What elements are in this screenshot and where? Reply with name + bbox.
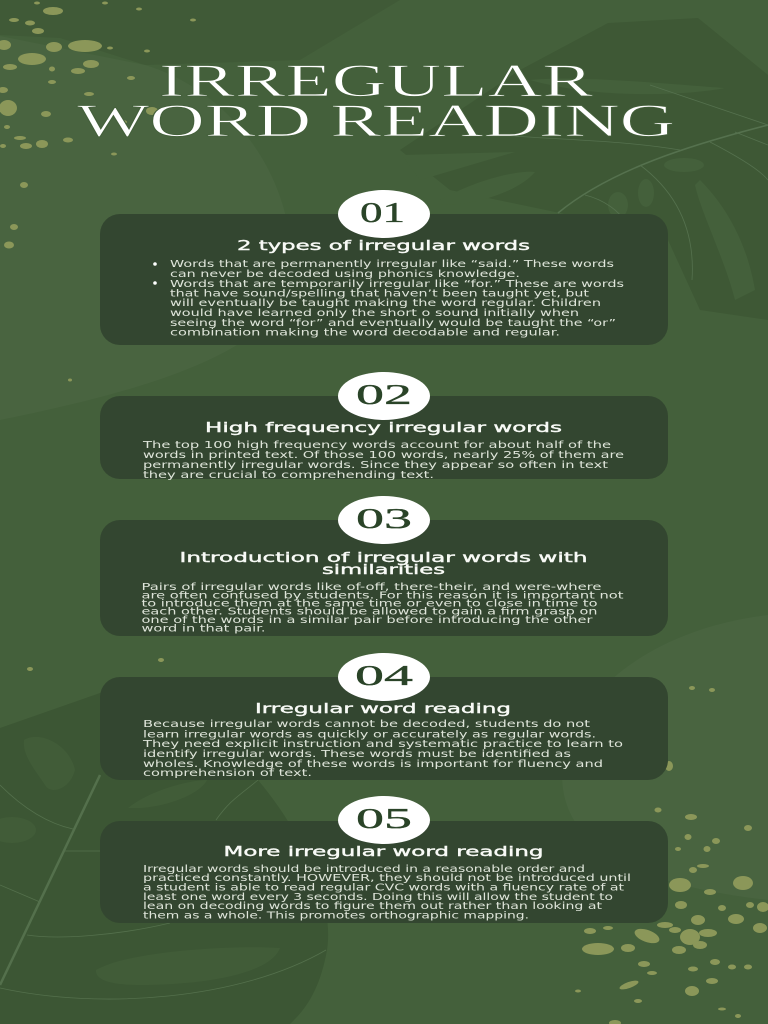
number badge 05: 05: [356, 804, 412, 835]
body text: permanently irregular words. Since they appear so often in text: [143, 460, 608, 471]
body text: wholes. Knowledge of these words is important for fluency and: [143, 759, 603, 770]
number badge 04: 04: [355, 661, 413, 692]
body text: words in printed text. Of those 100 words, nearly 25% of them are: [143, 450, 624, 461]
bullet list: Words that are permanently irregular like “said.” These words: [170, 259, 614, 270]
body text: to introduce them at the same time or even to close in time to: [142, 598, 598, 610]
body text: [141, 440, 624, 481]
panel: high frequency irregular words: [100, 372, 668, 481]
title: IRREGULAR: [159, 55, 594, 107]
panel: introduction of irregular words with similarities: [100, 496, 668, 636]
body text: a student is able to read regular CVC words with a fluency rate of at: [143, 882, 624, 894]
heading: More irregular word reading: [224, 844, 544, 860]
number badge 04: [338, 653, 430, 701]
heading: High frequency irregular words: [205, 420, 562, 436]
body text: Irregular words should be introduced in a reasonable order and: [143, 864, 585, 875]
number badge 01: 01: [360, 198, 405, 229]
bullet list: seeing the word “for” and eventually would be taught the “or”: [170, 318, 616, 329]
title: WORD READING: [77, 95, 675, 147]
panel: irregular word reading: [100, 653, 668, 780]
body text: one of the words in a similar pair before introducing the other: [142, 615, 593, 626]
body text: practiced constantly. HOWEVER, they should not be introduced until: [143, 873, 631, 884]
bullet list: would have learned only the short o sound initially when: [170, 308, 579, 319]
body text: The top 100 high frequency words account for about half of the: [141, 440, 611, 451]
body text: Because irregular words cannot be decoded, students do not: [143, 719, 590, 730]
body text: word in that pair.: [142, 624, 266, 634]
bullet list: [153, 259, 624, 338]
body text: least one word every 3 seconds. Doing this will allow the student to: [143, 892, 613, 903]
panel: more irregular word reading: [100, 796, 668, 923]
body text: Pairs of irregular words like of-off, there-their, and were-where: [142, 582, 602, 593]
number badge 01: [338, 190, 430, 238]
body text: them as a whole. This promotes orthographic mapping.: [143, 910, 529, 922]
heading: similarities: [322, 562, 445, 578]
body text: identify irregular words. These words must be identified as: [143, 749, 571, 760]
bullet list: Words that are temporarily irregular like “for.” These are words: [170, 279, 624, 290]
title: [77, 55, 675, 147]
body text: [142, 582, 624, 634]
body text: learn irregular words as quickly or accurately as regular words.: [143, 730, 596, 740]
body text: comprehension of text.: [143, 768, 312, 779]
body text: are often confused by students. For this reason it is important not: [142, 590, 624, 602]
body text: lean on decoding words to figure them out rather than looking at: [143, 901, 602, 912]
number badge 03: 03: [356, 504, 412, 535]
number badge 05: [338, 796, 430, 844]
bullet list: combination making the word decodable and regular.: [170, 328, 560, 338]
panel: 2 types of irregular words: [100, 190, 668, 345]
body text: [141, 719, 623, 779]
bullet list: will eventually be taught making the word regular. Children: [170, 298, 601, 309]
body text: they are crucial to comprehending text.: [143, 470, 434, 481]
heading: 2 types of irregular words: [237, 238, 530, 254]
body text: They need explicit instruction and systematic practice to learn to: [141, 739, 623, 750]
number badge 02: [338, 372, 430, 420]
heading: Irregular word reading: [255, 701, 511, 717]
body text: each other. Students should be allowed to gain a firm grasp on: [142, 606, 598, 618]
number badge 02: 02: [356, 380, 412, 411]
number badge 03: [338, 496, 430, 544]
heading: Introduction of irregular words with: [180, 550, 588, 566]
body text: [143, 864, 631, 922]
heading: [180, 550, 588, 578]
bullet list: can never be decoded using phonics knowledge.: [170, 269, 520, 280]
bullet list: that have sound/spelling that haven’t been taught yet, but: [170, 288, 589, 300]
